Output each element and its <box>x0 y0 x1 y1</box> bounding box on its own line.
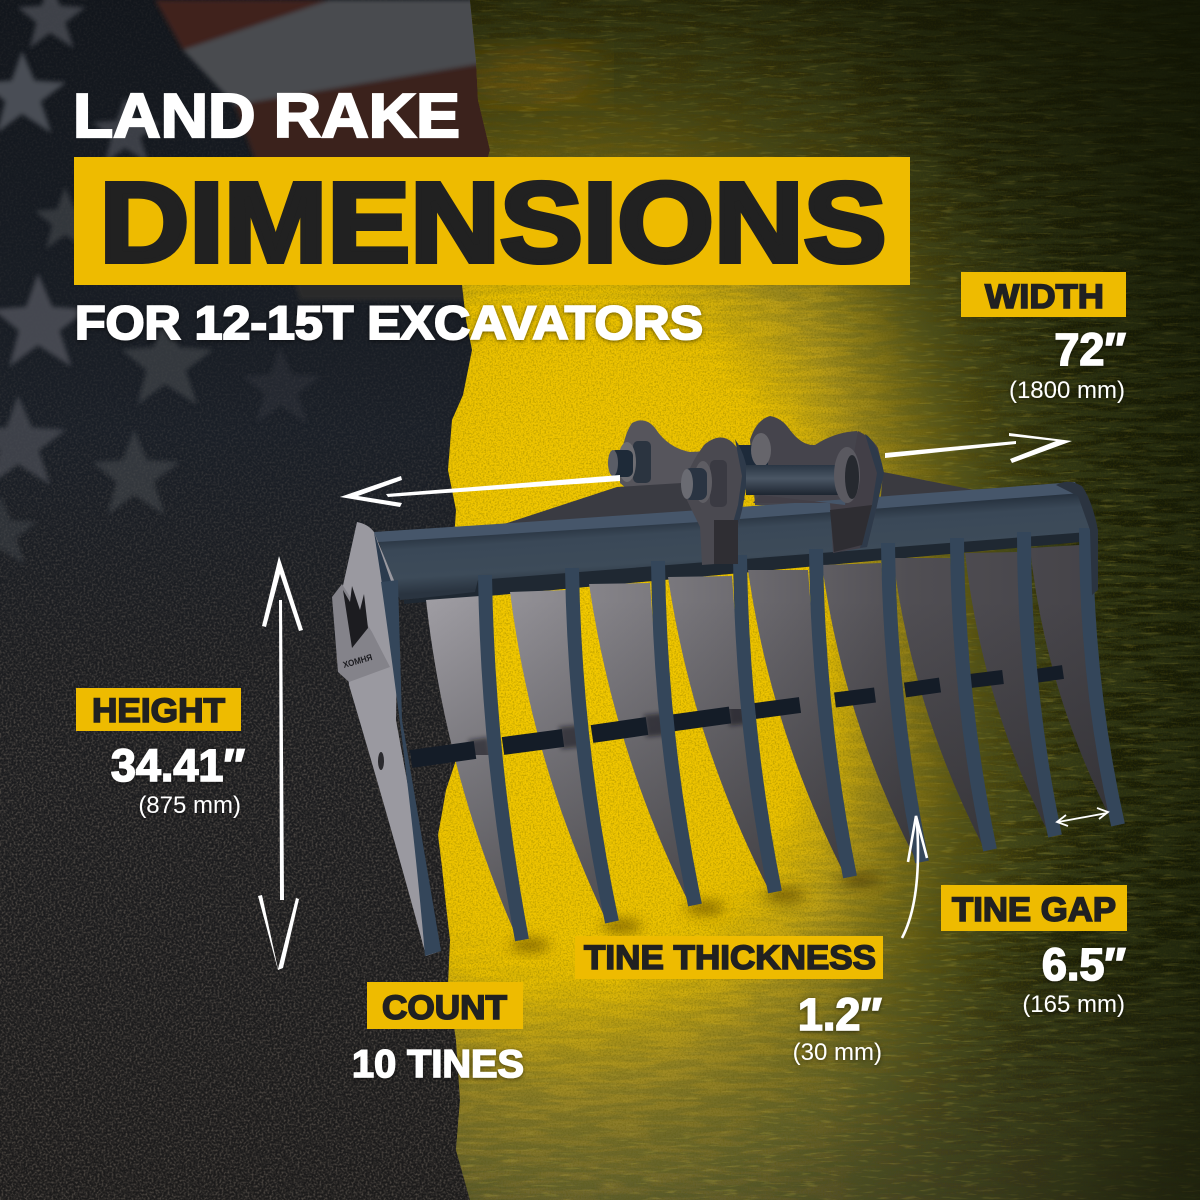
background: dark left half <box>0 0 472 1200</box>
arrow: tine gap <box>1057 808 1108 826</box>
spec: width: (1800 mm) <box>1009 377 1125 404</box>
spec: height: 34.41″ <box>111 740 245 791</box>
right end cap <box>1056 482 1098 595</box>
arrow: height <box>258 556 303 970</box>
background: American flag stripes <box>155 0 495 300</box>
title <box>73 82 910 349</box>
tine blades <box>426 545 1118 938</box>
background: flag stars <box>0 0 322 565</box>
cross rod spacer tubes <box>411 672 1063 759</box>
spec: tine thickness <box>575 936 883 1066</box>
background: grunge yellow right half <box>430 0 1200 1200</box>
spec: tine gap: (165 mm) <box>1022 991 1125 1018</box>
arrow: tine thickness <box>902 816 927 938</box>
logo plate <box>332 584 390 682</box>
left end plate <box>342 522 441 956</box>
shadows under tine tips <box>510 873 880 952</box>
logo plate: ХОМНЯ <box>342 652 373 670</box>
spec: width: WIDTH <box>985 278 1104 316</box>
spec: count: COUNT <box>382 989 507 1027</box>
dimensions banner: DIMENSIONS <box>100 160 886 286</box>
title: FOR 12-15T EXCAVATORS <box>75 296 703 349</box>
spec: tine thickness: (30 mm) <box>793 1039 882 1066</box>
spec: tine gap: TINE GAP <box>952 891 1116 929</box>
arrow: width <box>340 433 1072 507</box>
top beam <box>374 482 1092 604</box>
spec: height: HEIGHT <box>92 692 225 730</box>
spec: tine thickness: 1.2″ <box>798 989 882 1040</box>
spec: count: 10 TINES <box>352 1043 524 1086</box>
spec: width: 72″ <box>1054 324 1126 375</box>
land rake machine <box>332 416 1118 956</box>
spec: tine gap <box>941 885 1127 1018</box>
left and right gussets <box>495 472 990 531</box>
upper rear mounting ears <box>608 416 880 508</box>
spec: tine gap: 6.5″ <box>1042 939 1126 990</box>
spec: count <box>352 982 524 1086</box>
spec: height <box>76 688 245 819</box>
title: LAND RAKE <box>73 82 460 151</box>
front mounting ears and pin <box>681 431 884 565</box>
spec: height: (875 mm) <box>138 792 241 819</box>
tines <box>485 528 1118 940</box>
spec: width <box>961 272 1126 404</box>
spec: tine thickness: TINE THICKNESS <box>584 939 876 977</box>
